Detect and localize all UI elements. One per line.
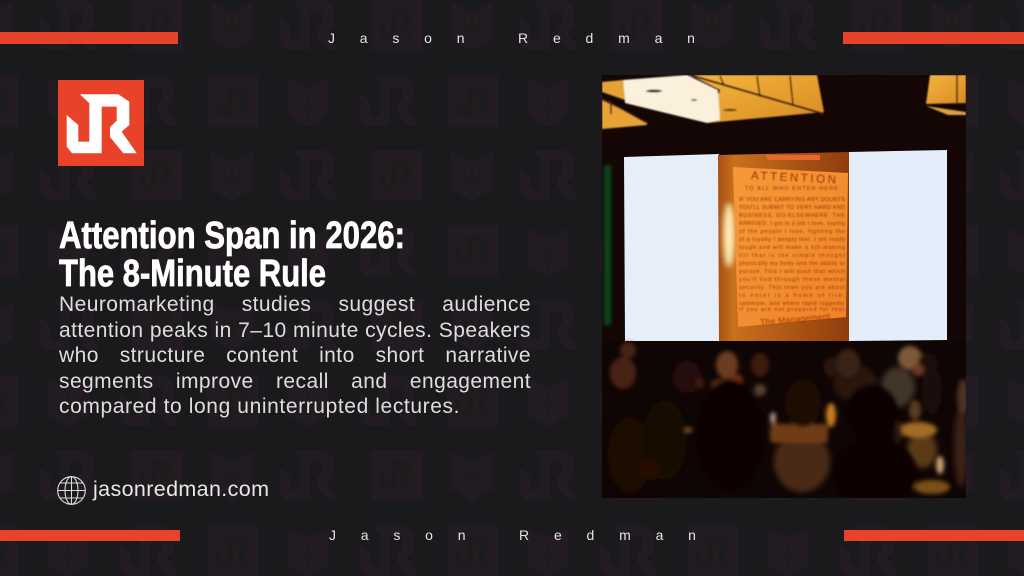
website link: jasonredman.com bbox=[92, 477, 269, 501]
top name: Jason Redman bbox=[328, 30, 720, 46]
icon: globe bbox=[58, 477, 85, 504]
top left bar bbox=[0, 32, 178, 44]
body text bbox=[59, 293, 531, 418]
bottom left bar bbox=[0, 530, 180, 541]
handwritten note: till that is the simple thought bbox=[739, 253, 845, 259]
handwritten note: of a loyalty I deeply feel. I am ready bbox=[739, 237, 845, 243]
title: Attention Span in 2026: bbox=[59, 215, 405, 257]
handwritten note: of the people I love, fighting the bbox=[739, 229, 845, 235]
handwritten note: YOU'LL SUBMIT TO VERY HARD AND bbox=[739, 205, 845, 211]
handwritten note: BUSINESS, GO ELSEWHERE. THE bbox=[739, 213, 845, 219]
handwritten note: ATTENTION bbox=[751, 170, 836, 186]
handwritten note: The Management bbox=[760, 311, 831, 327]
logo bbox=[58, 80, 144, 166]
top right bar bbox=[843, 32, 1024, 44]
projection screen bbox=[624, 150, 947, 341]
handwritten note: pursue. This I will push that which bbox=[739, 269, 845, 275]
bottom name: Jason Redman bbox=[329, 527, 721, 543]
body text: Neuromarketing studies suggest audience bbox=[59, 293, 531, 316]
handwritten note: TO ALL WHO ENTER HERE bbox=[745, 186, 838, 192]
handwritten note: If you are not prepared for that bbox=[739, 307, 844, 313]
photo: speaker screen and audience bbox=[602, 75, 969, 507]
audience bbox=[602, 341, 969, 507]
handwritten note: optimism, and where rapid raggedly bbox=[739, 301, 844, 307]
logo mark: JR bbox=[67, 94, 137, 153]
handwritten note: you'll find through these mental bbox=[739, 277, 845, 283]
body text: attention peaks in 7–10 minute cycles. Speakers bbox=[59, 319, 531, 342]
body text: who structure content into short narrative bbox=[59, 344, 531, 367]
body text: compared to long uninterrupted lectures. bbox=[59, 395, 460, 418]
handwritten note: physically my body and the ability to bbox=[739, 261, 845, 267]
handwritten note: security. This town you are about bbox=[739, 285, 845, 291]
handwritten note: tough and will make a kill-making bbox=[739, 245, 845, 251]
title bbox=[59, 215, 405, 295]
handwritten note bbox=[739, 170, 845, 327]
ceiling lamps bbox=[602, 75, 966, 129]
green side light bbox=[604, 165, 611, 325]
handwritten note: IF YOU ARE CARRYING ANY DOUBTS bbox=[739, 197, 845, 203]
handwritten note: to enter is a home of fire, bbox=[739, 293, 845, 299]
handwritten note: ARRIVED. I got in a job I love, saying bbox=[739, 221, 845, 227]
title: The 8-Minute Rule bbox=[59, 253, 326, 295]
bottom right bar bbox=[844, 530, 1024, 541]
body text: segments improve recall and engagement bbox=[59, 370, 531, 393]
